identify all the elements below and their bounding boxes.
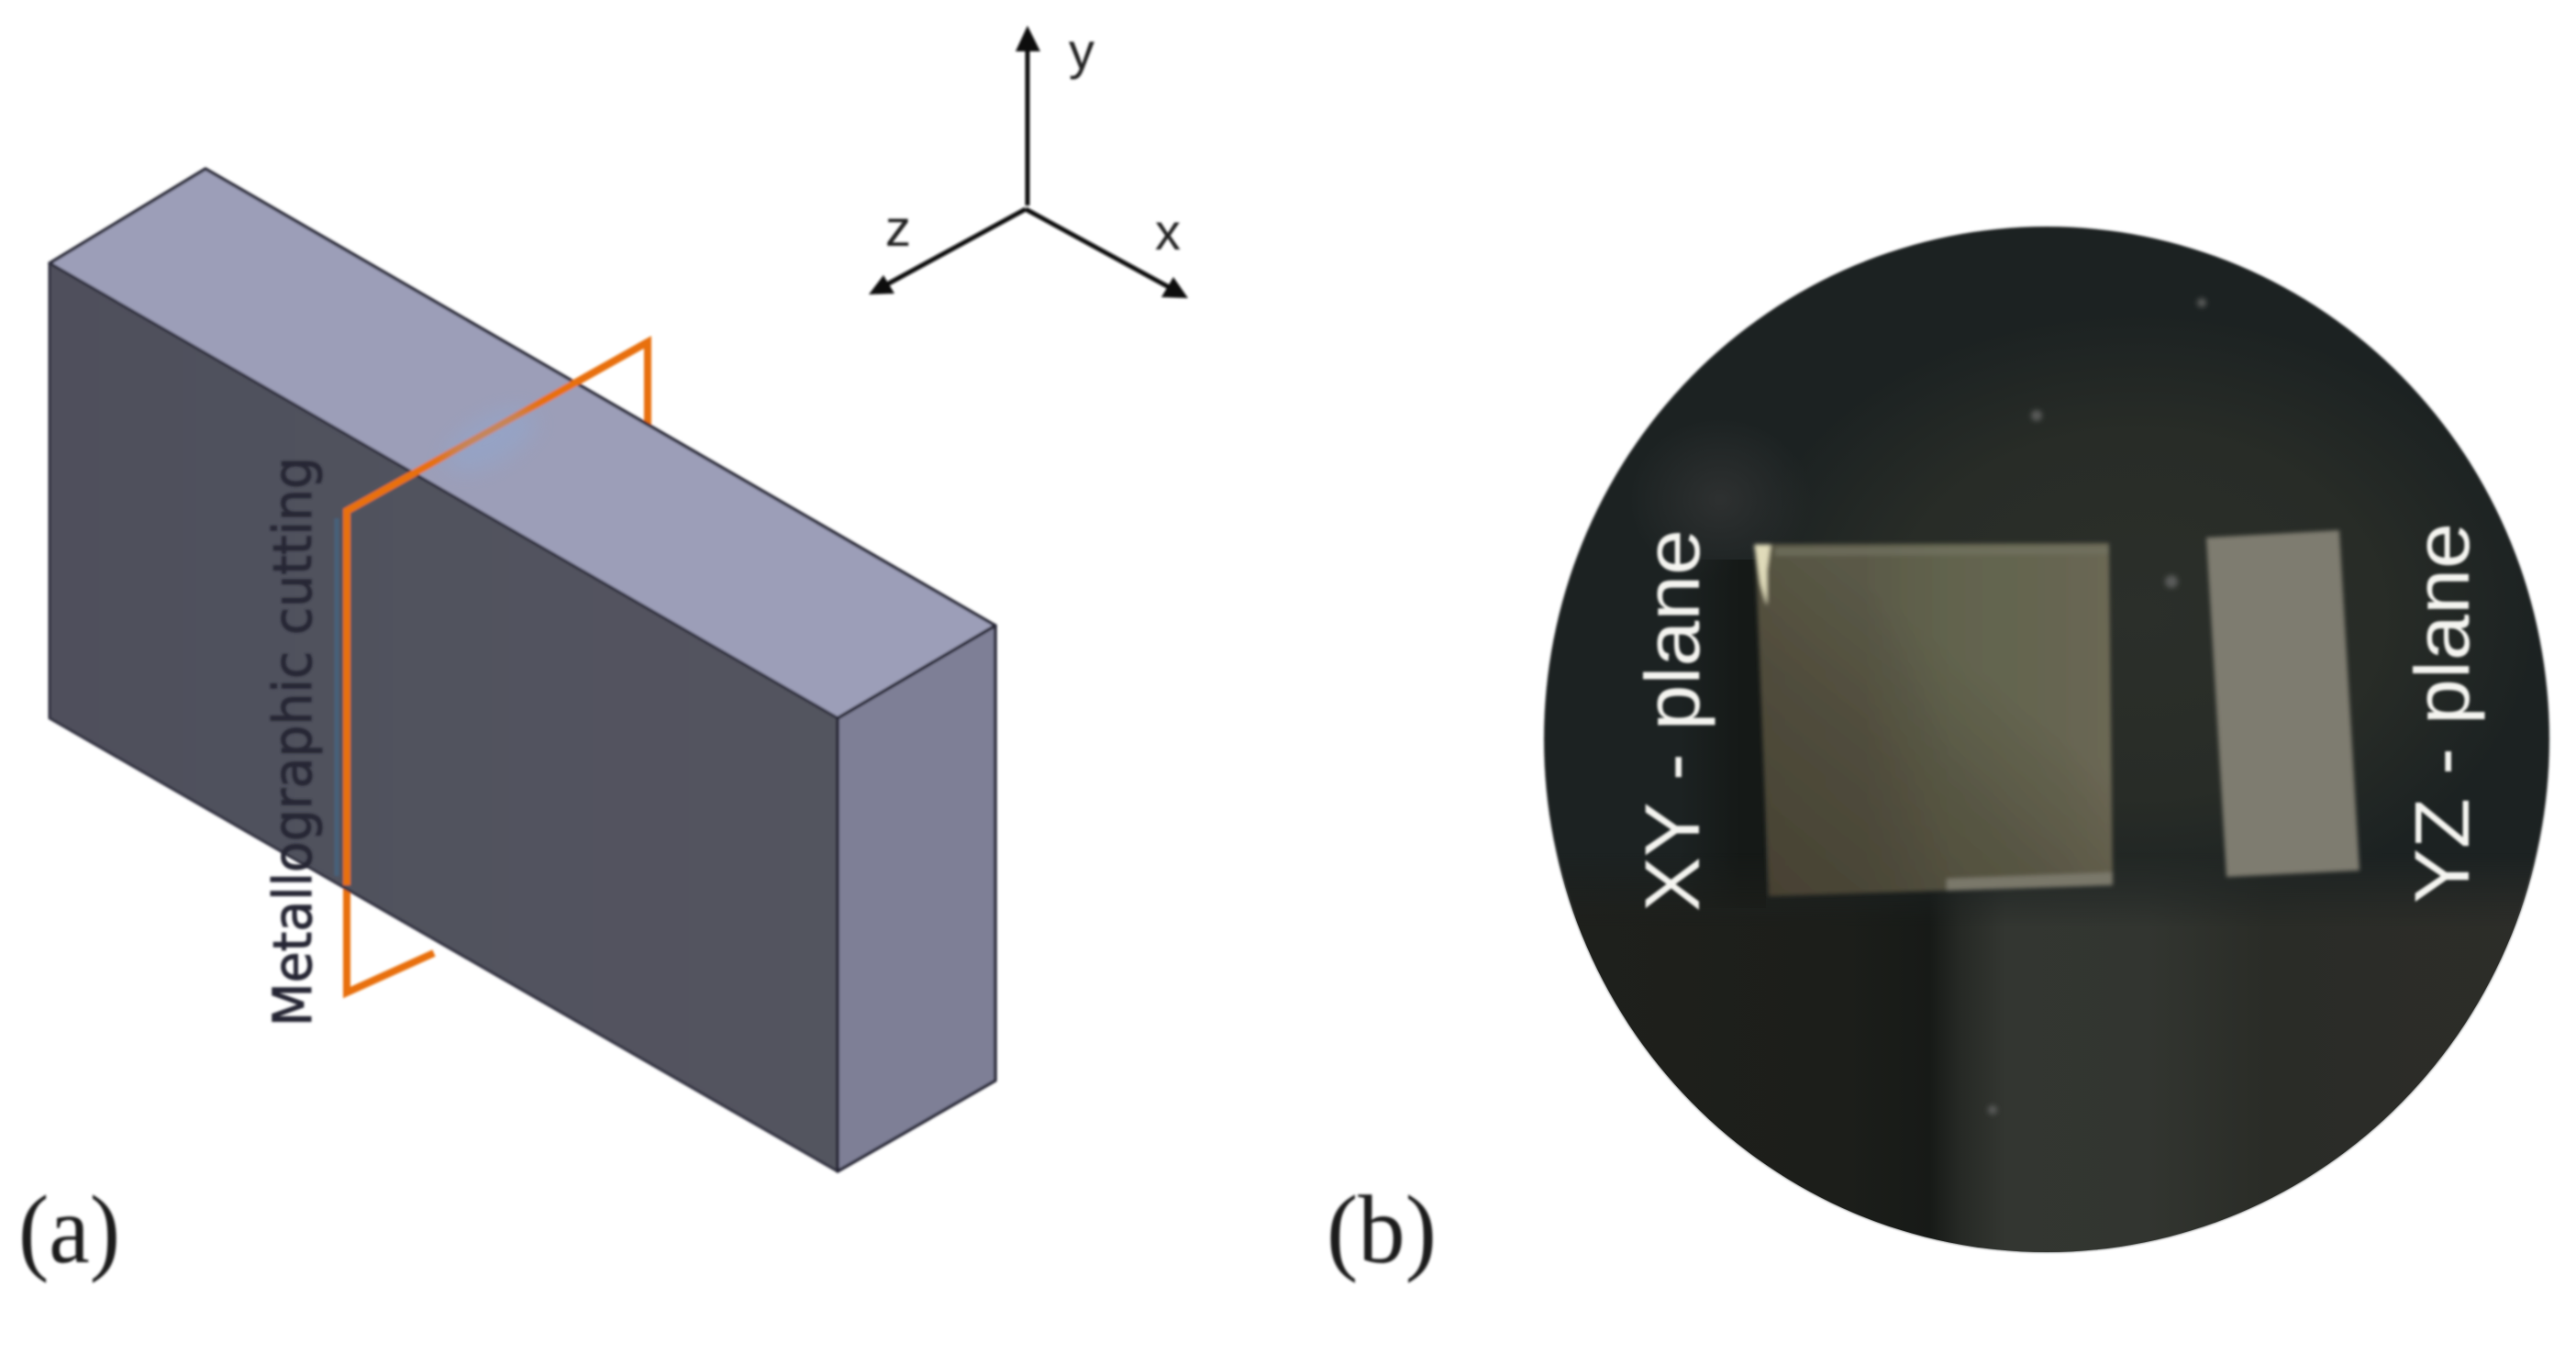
label: Metallographic cutting: Metallographic cutting bbox=[261, 457, 324, 1026]
cutting plane: blue tint on top face bbox=[436, 396, 546, 484]
panel b: mounted sample disc bbox=[1541, 227, 2550, 1266]
axis: y bbox=[1016, 26, 1040, 205]
axis: x bbox=[1026, 209, 1188, 298]
label: XY - plane: XY - plane bbox=[1629, 529, 1715, 912]
sample: XY plane bbox=[1754, 543, 2113, 896]
panel label: (a): (a) bbox=[18, 1176, 120, 1283]
block: back part of orange cutting plane bbox=[347, 342, 648, 993]
cutting plane: orange outline in front bbox=[347, 342, 648, 885]
panel label: (b): (b) bbox=[1327, 1176, 1437, 1283]
disc: reflection bands bbox=[1541, 298, 2550, 1266]
label: YZ - plane: YZ - plane bbox=[2399, 523, 2485, 904]
sample: YZ plane bbox=[2206, 530, 2359, 877]
axis label: y: y bbox=[1069, 22, 1094, 80]
block: right face bbox=[838, 626, 995, 1171]
panel a: block with cutting plane bbox=[50, 169, 995, 1171]
block: top face bbox=[50, 169, 995, 718]
axis: z bbox=[869, 209, 1026, 294]
cutting plane: colour fringe bbox=[334, 518, 339, 876]
disc: black resin mount bbox=[1544, 227, 2549, 1252]
coordinate axes bbox=[869, 22, 1188, 298]
block: front face bbox=[50, 263, 838, 1171]
axis label: z: z bbox=[885, 199, 911, 257]
disc: specks bbox=[1986, 295, 2209, 1116]
axis label: x: x bbox=[1155, 203, 1181, 261]
